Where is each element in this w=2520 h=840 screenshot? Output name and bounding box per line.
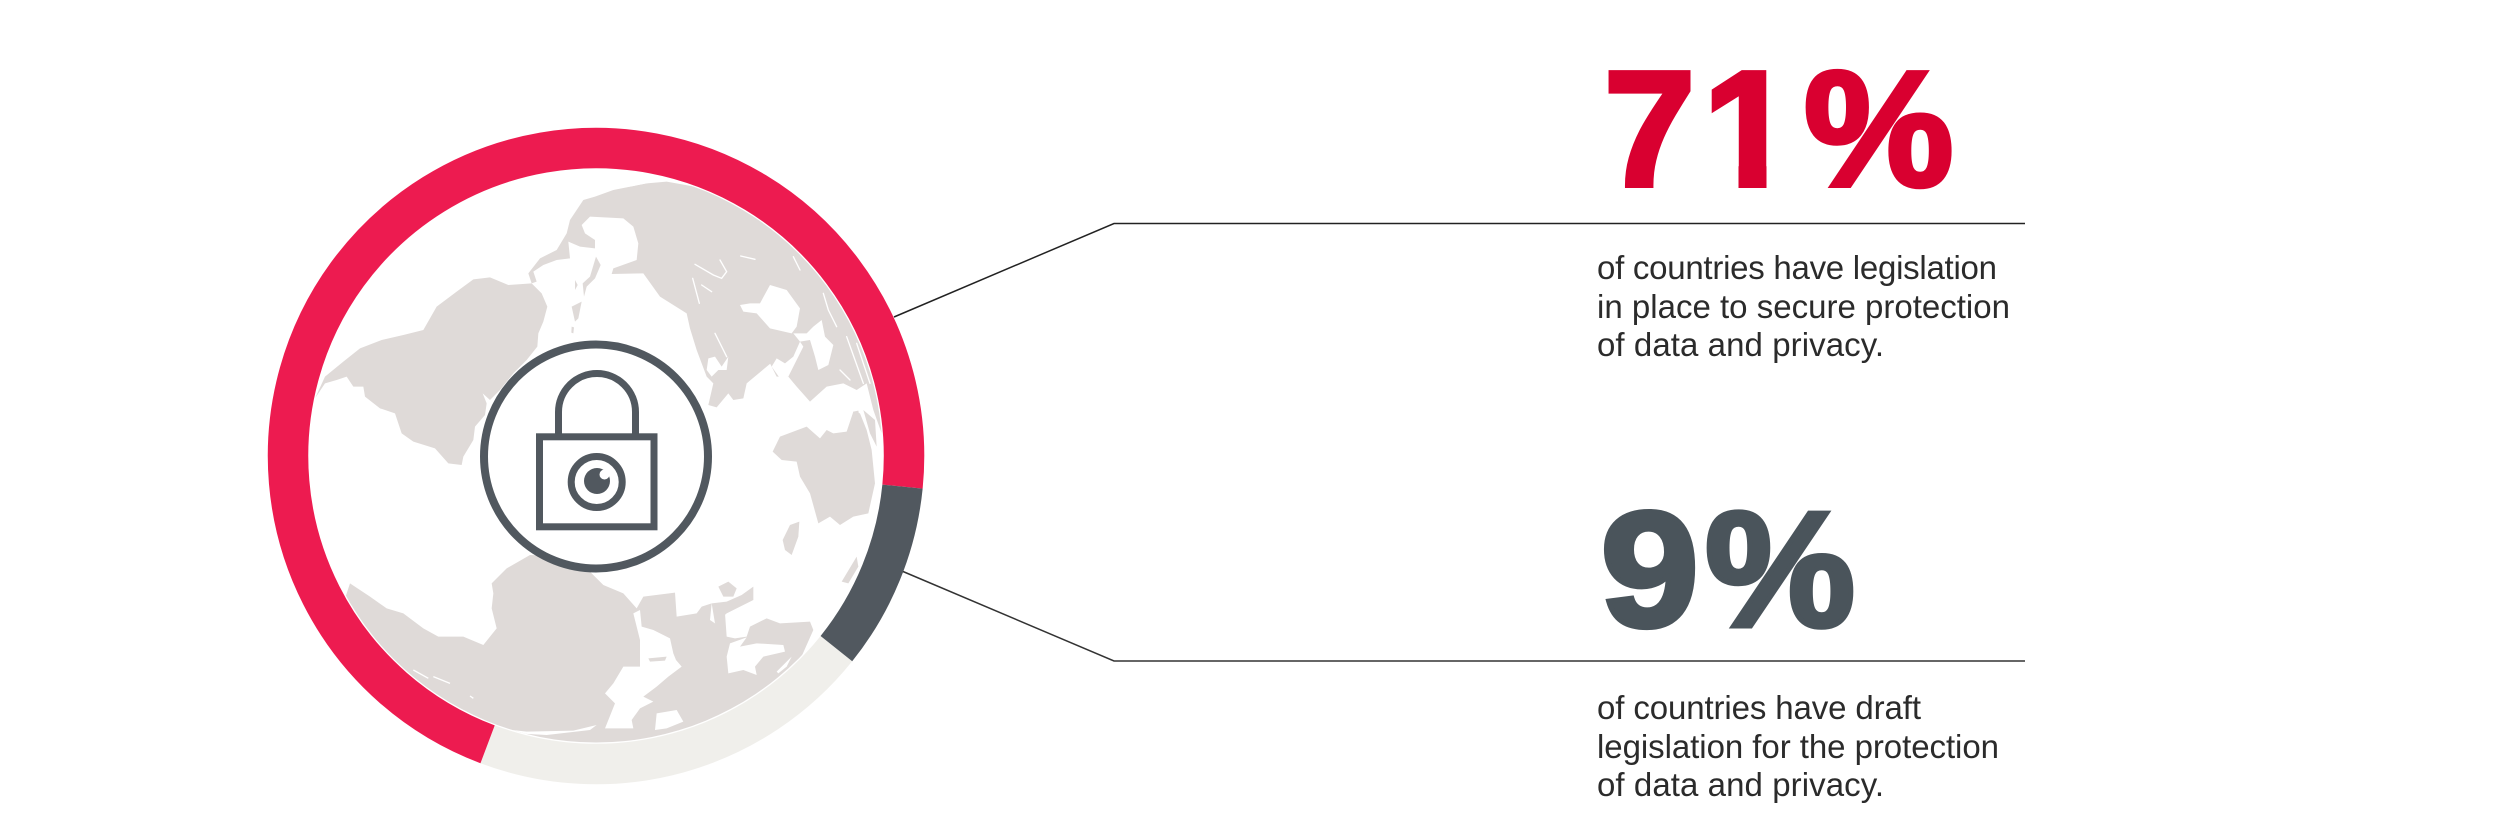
description: 71%: in place to secure protection xyxy=(1597,288,2010,325)
land: southern continent xyxy=(346,555,814,742)
ring segment: 9 percent xyxy=(836,487,902,649)
connector line: 71 percent xyxy=(894,224,2025,317)
connector line: 9 percent xyxy=(903,572,2025,661)
donut chart ring xyxy=(288,148,904,764)
stat: 71%: 7 xyxy=(1604,38,1695,220)
stat: 9%: % xyxy=(1705,478,1855,661)
description: 9%: of countries have draft xyxy=(1597,689,1921,726)
stat: 9%: 9 xyxy=(1600,478,1699,662)
ring segment: no legislation xyxy=(488,649,836,764)
description: 9%: of data and privacy. xyxy=(1597,766,1884,803)
ring segment: 71 percent xyxy=(288,148,904,744)
description: 71%: of data and privacy. xyxy=(1597,326,1884,363)
stat: 71%: 1 xyxy=(1703,38,1794,220)
stat: 71% xyxy=(1604,38,1953,221)
icon: padlock with eye xyxy=(484,344,708,568)
globe map xyxy=(315,181,897,767)
land: eastern continent and islands xyxy=(773,410,877,583)
land: northern continent xyxy=(528,181,897,433)
stat: 71%: % xyxy=(1804,38,1953,221)
description: 9%: legislation for the protection xyxy=(1597,728,1999,765)
stat: 9% xyxy=(1600,478,1855,662)
land: upper left continent xyxy=(315,277,582,465)
description: 71%: of countries have legislation xyxy=(1597,249,1997,286)
